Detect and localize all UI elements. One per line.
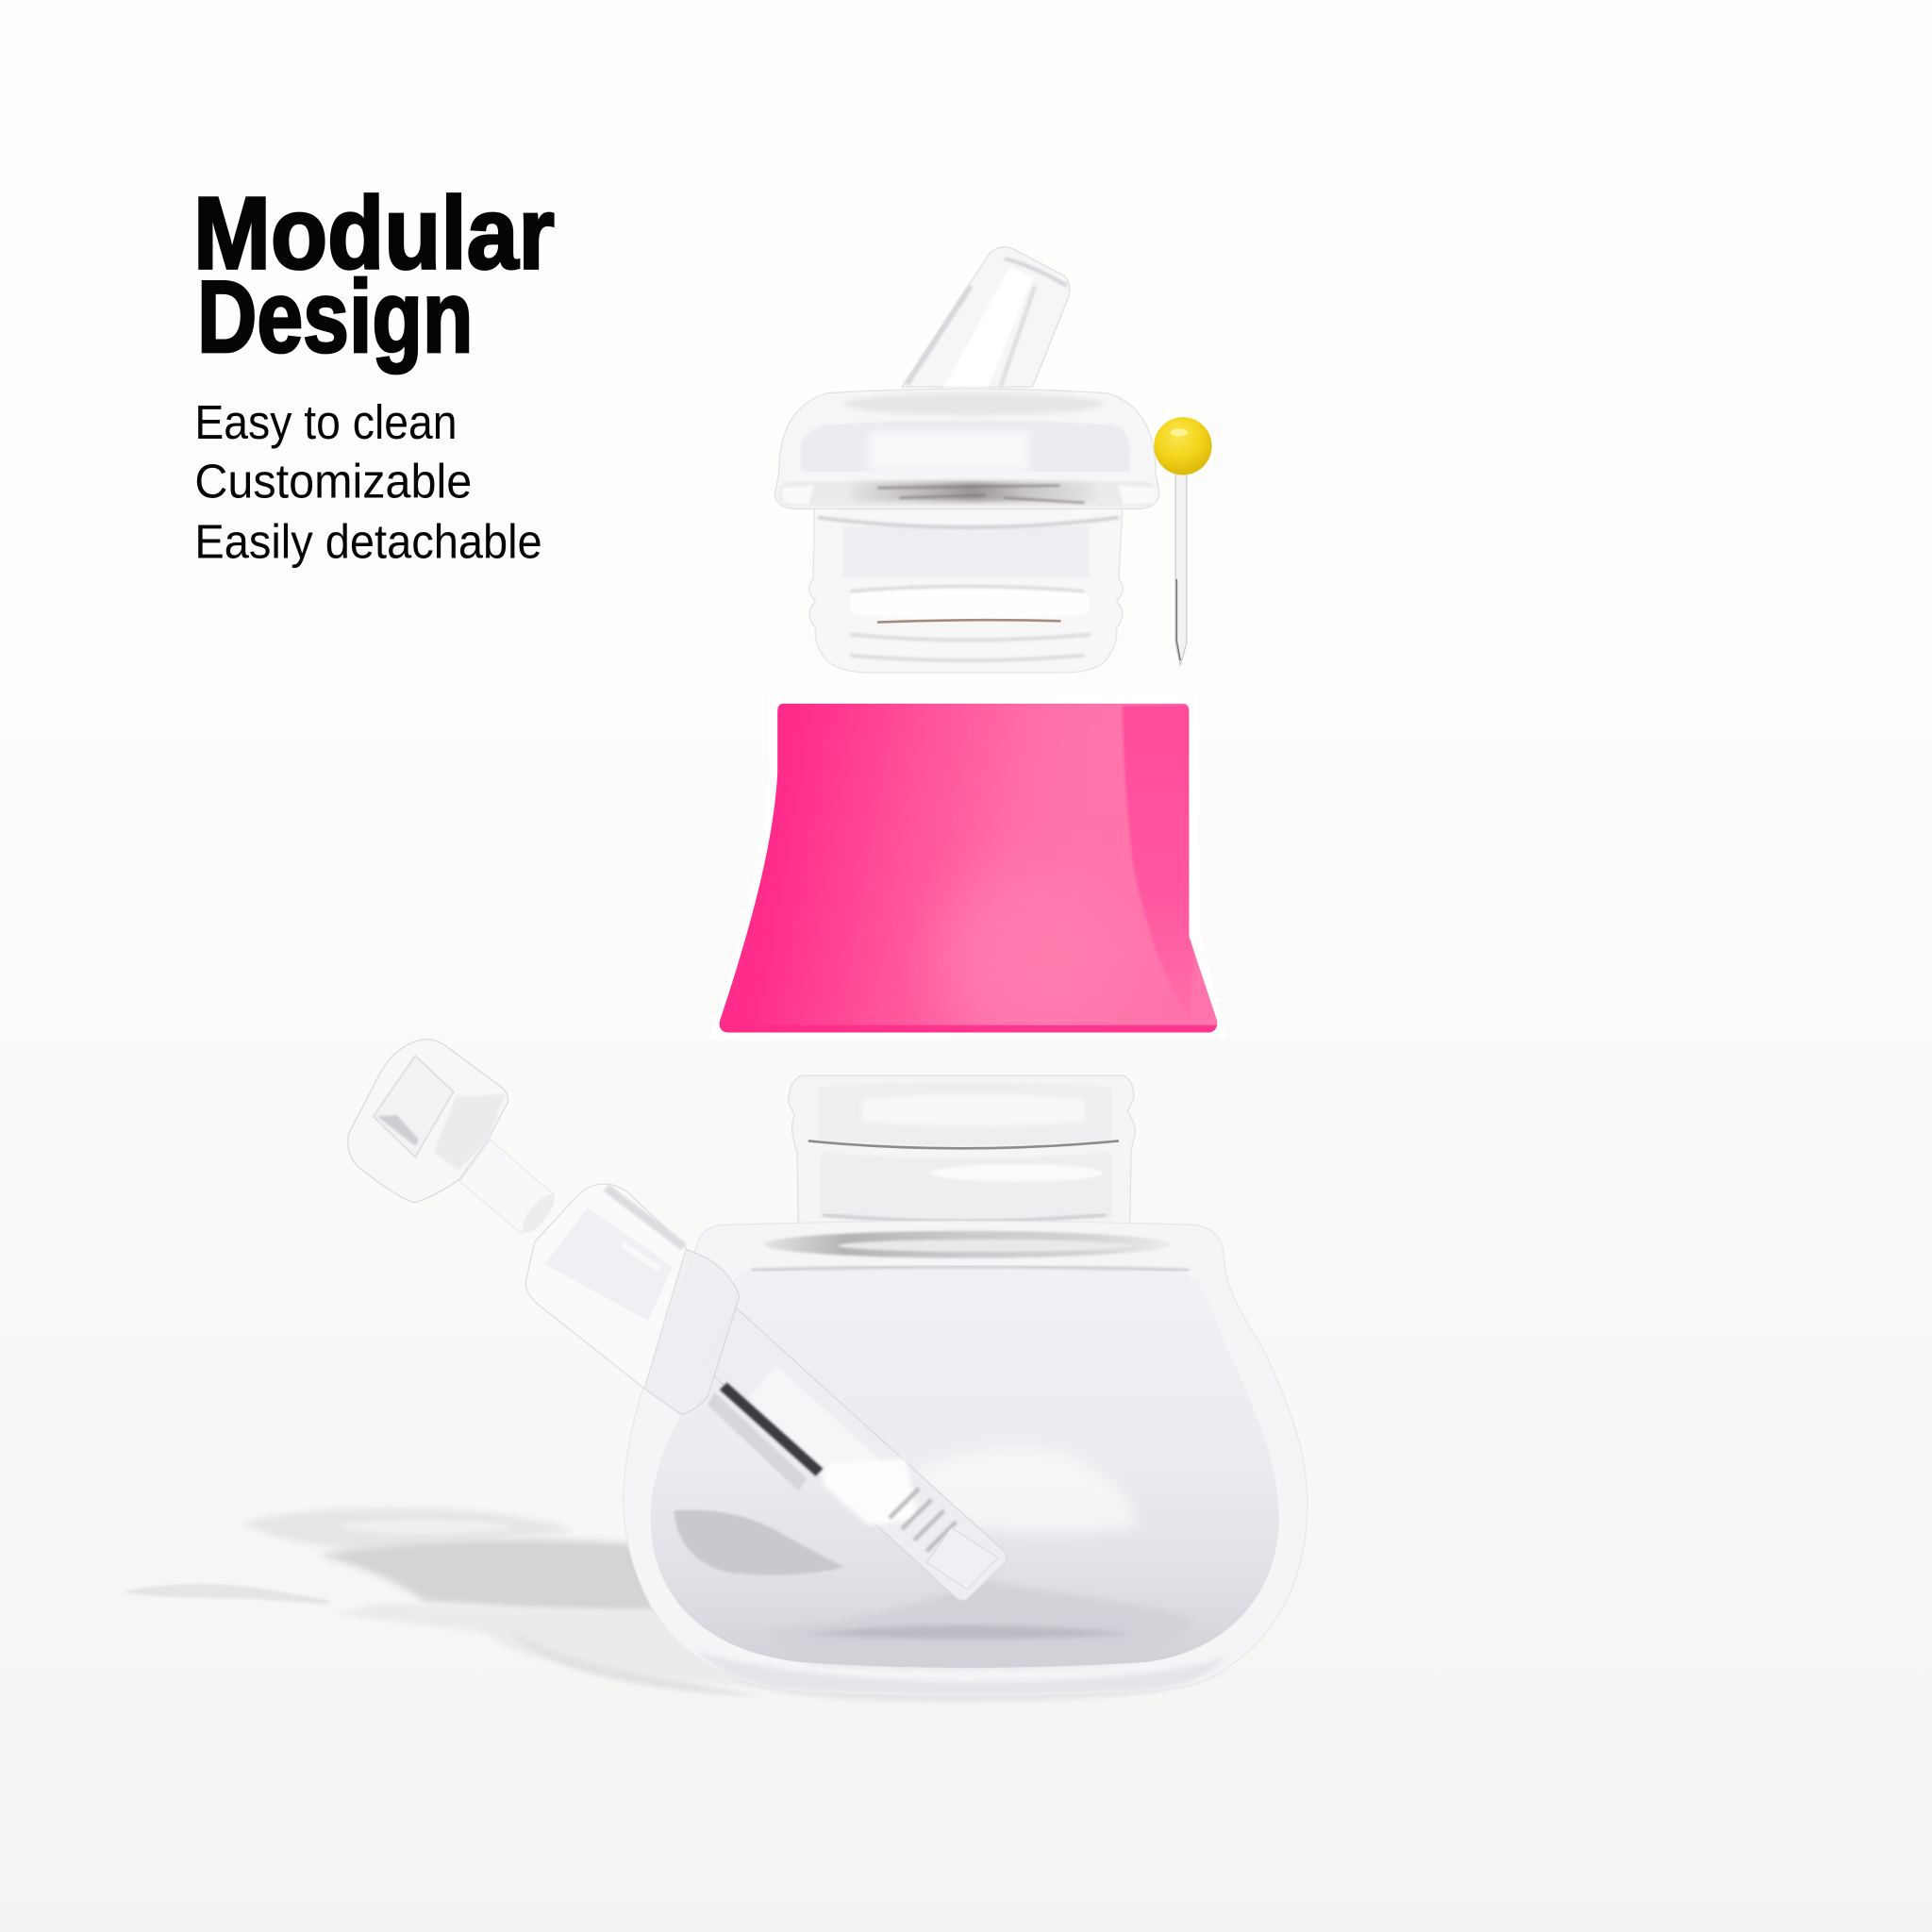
joint collar: [644, 1249, 740, 1414]
feature list: Easily detachable: [194, 515, 542, 569]
base crescent: [696, 1651, 1226, 1695]
pink silicone sleeve: [719, 704, 1217, 1032]
base neck: [789, 1075, 1135, 1230]
feature list: [194, 395, 542, 569]
shoulder ring: [752, 1231, 1189, 1271]
bowl stem: [459, 1140, 555, 1233]
glass mouthpiece cap: [775, 247, 1159, 673]
threaded neck: [808, 508, 1124, 673]
left dark patch: [674, 1510, 844, 1575]
spout: [902, 247, 1070, 387]
title: Modular: [193, 176, 555, 291]
glass base with neck: [525, 1075, 1307, 1696]
joint tube: [525, 1184, 687, 1389]
title: [193, 176, 555, 374]
bottom pool: [764, 1581, 1195, 1667]
body outer wall: [624, 1221, 1307, 1696]
body inner chamber: [651, 1267, 1279, 1668]
white refraction: [894, 1447, 1139, 1534]
downstem: [702, 1308, 1007, 1601]
title: Design: [197, 259, 474, 374]
feature list: Customizable: [194, 455, 472, 508]
feature list: Easy to clean: [194, 395, 458, 449]
yellow pin: [1154, 417, 1212, 665]
flange: [775, 389, 1159, 508]
pool dark arc: [806, 1625, 1134, 1640]
glass bowl piece: [348, 1040, 559, 1238]
cast shadow: [122, 1507, 1226, 1702]
